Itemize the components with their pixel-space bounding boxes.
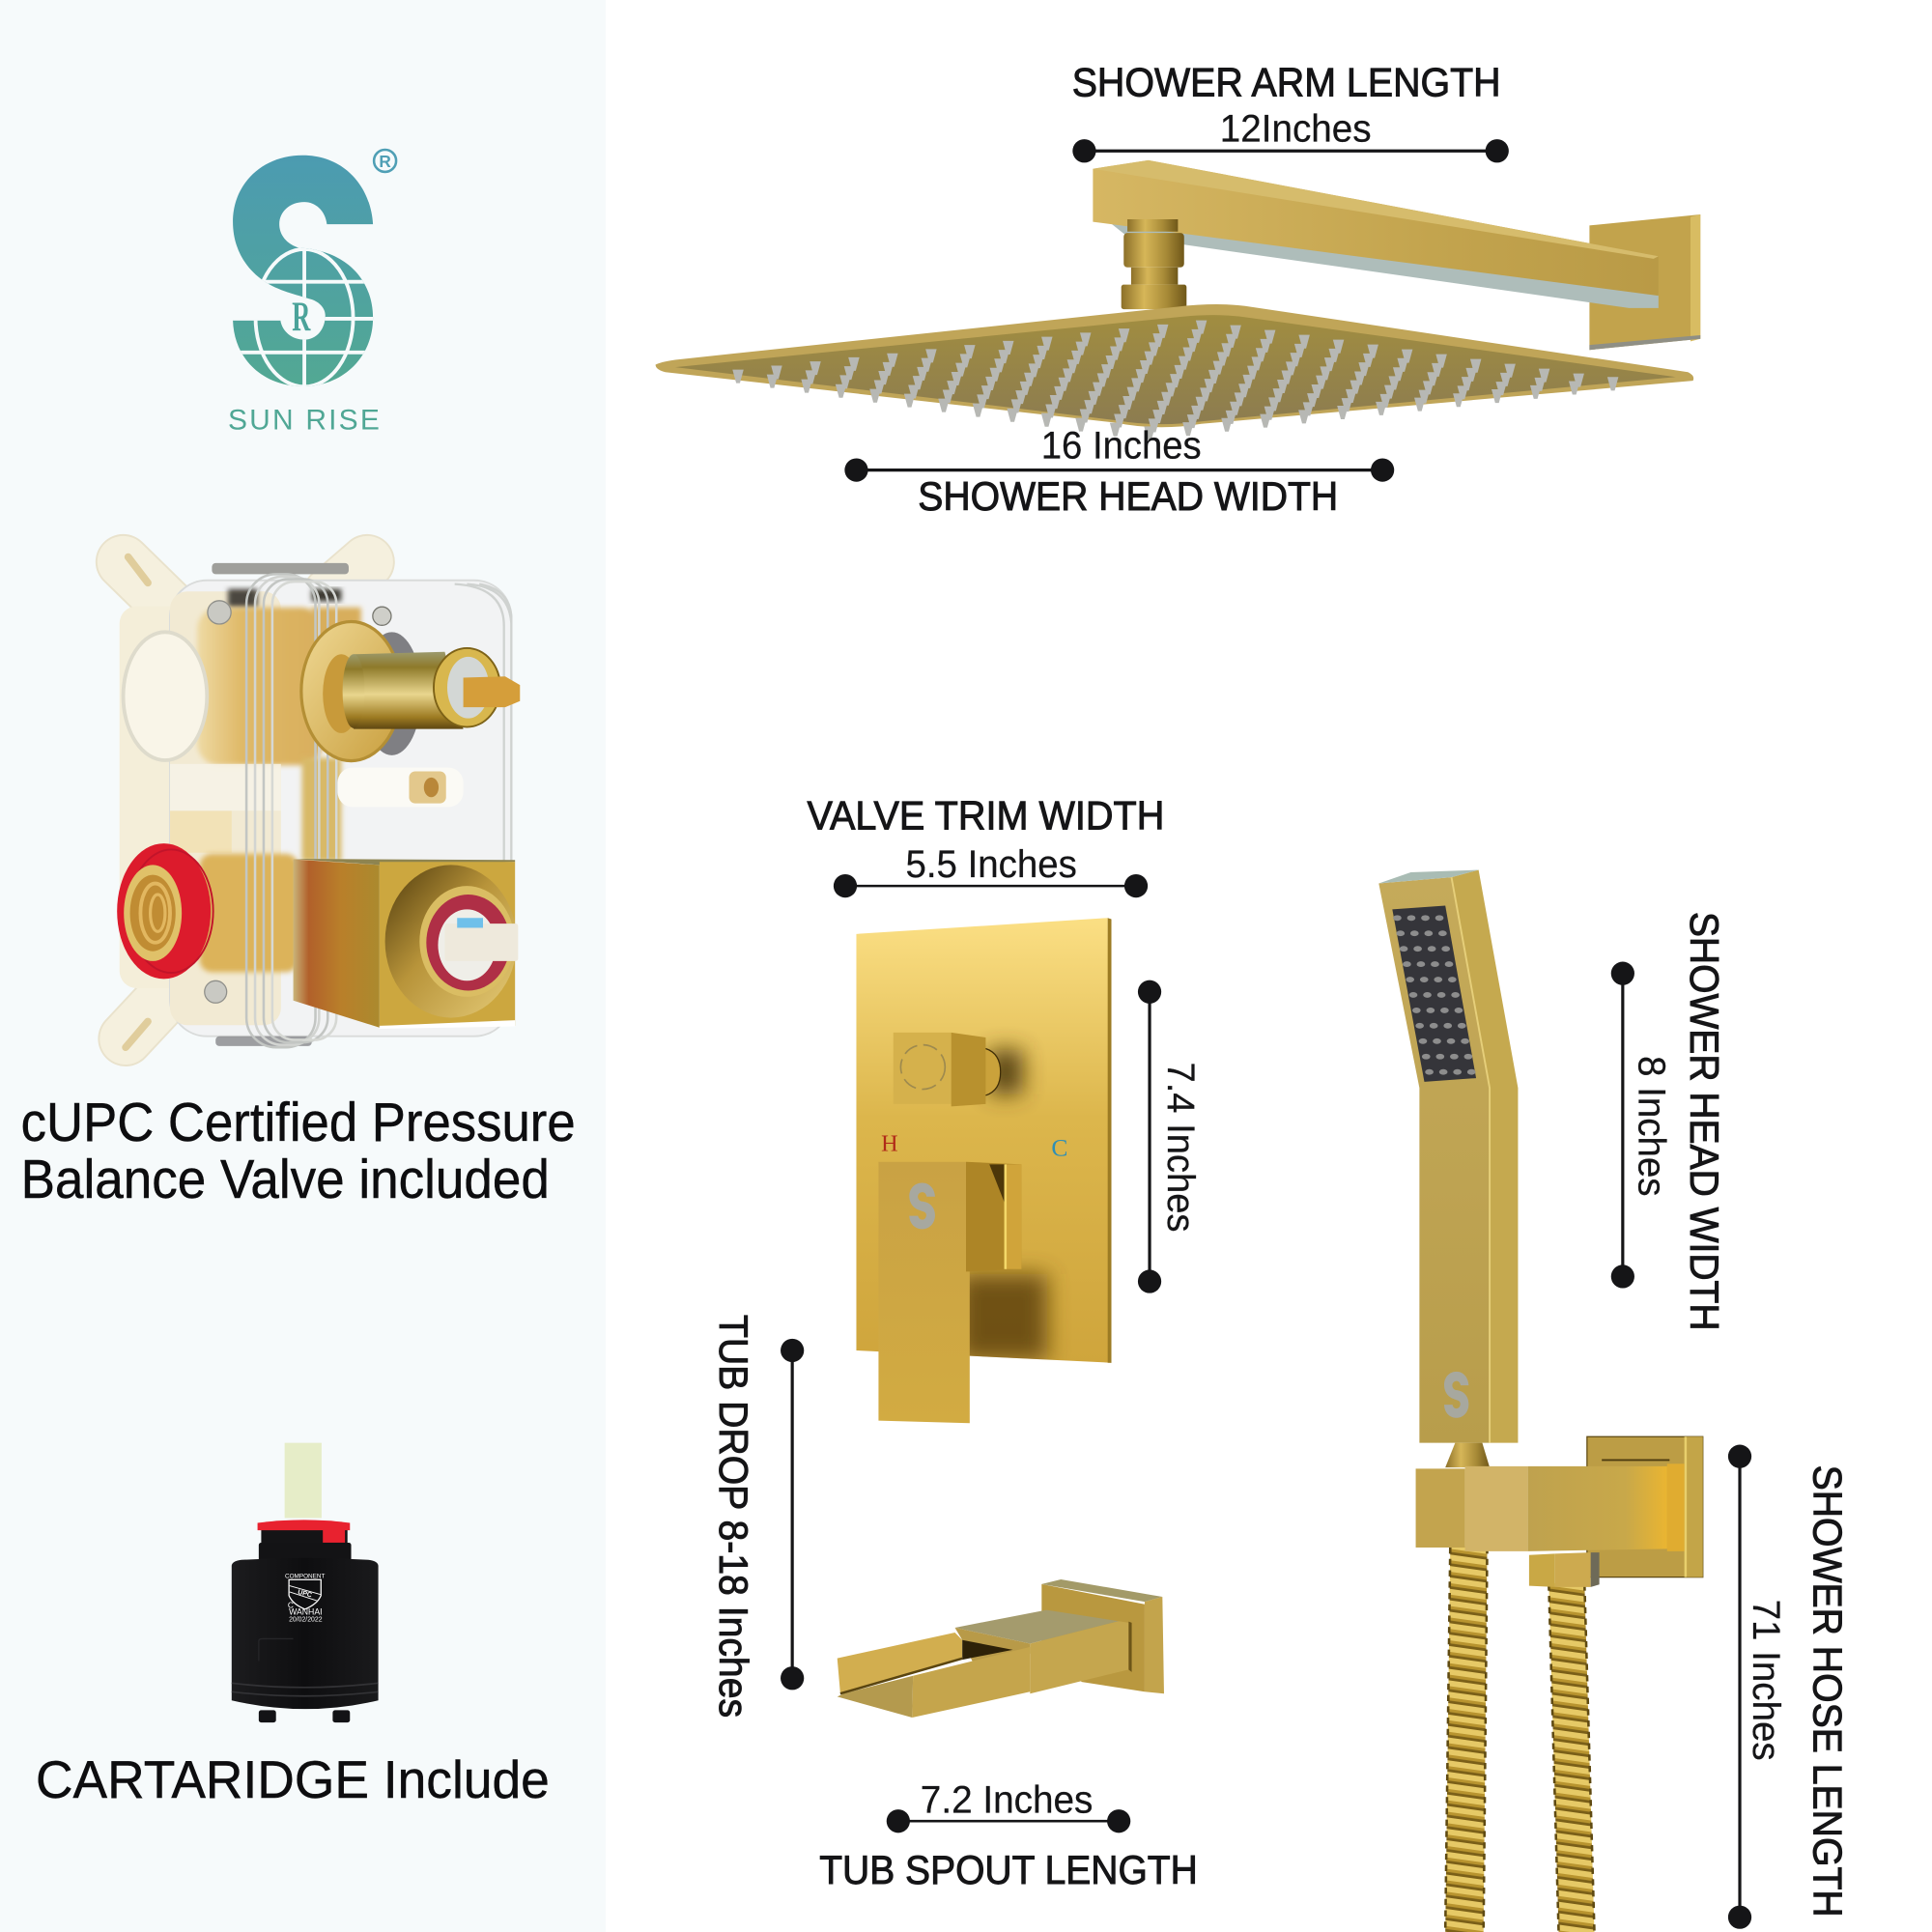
tub spout length dimension: TUB SPOUT LENGTH: [819, 1847, 1198, 1892]
tub spout length dimension: [819, 1778, 1198, 1892]
valve trim width dimension: 5.5 Inches: [906, 843, 1077, 886]
valve trim width dimension: VALVE TRIM WIDTH: [807, 792, 1164, 838]
brand logo: [222, 150, 396, 437]
cartridge photo: [232, 1443, 379, 1722]
valve trim plate: C: [1051, 1133, 1067, 1161]
valve trim plate: H: [881, 1130, 898, 1156]
pressure balance valve photo: [117, 557, 520, 1047]
hose length dimension: [1728, 1445, 1851, 1929]
tub drop dimension: TUB DROP 8-18 Inches: [711, 1315, 756, 1718]
hand shower height dimension: 8 Inches: [1630, 1056, 1672, 1197]
tub spout: [838, 1579, 1164, 1718]
valve caption: cUPC Certified Pressure: [21, 1092, 576, 1152]
hand shower height dimension: [1611, 912, 1727, 1331]
valve trim height dimension: 7.4 Inches: [1159, 1062, 1202, 1233]
hand shower: [1378, 870, 1518, 1467]
left panel background: [0, 0, 606, 1932]
brand logo: SUN RISE: [228, 405, 380, 437]
cartridge photo: 20/02/2022: [289, 1617, 323, 1624]
tub drop dimension: [711, 1315, 804, 1718]
tub spout length dimension: 7.2 Inches: [921, 1778, 1093, 1821]
cartridge photo: COMPONENT: [285, 1573, 325, 1579]
cartridge photo: C: [288, 1601, 294, 1610]
rain shower head with arm: [656, 160, 1700, 440]
hand shower bracket and hoses: [1416, 1436, 1703, 1932]
brand logo: R: [292, 294, 311, 340]
shower head width dimension: SHOWER HEAD WIDTH: [918, 473, 1338, 519]
cartridge photo: WANHAI: [289, 1607, 323, 1617]
brand logo: R: [379, 152, 391, 171]
shower arm dimension: 12Inches: [1220, 108, 1372, 151]
cartridge caption: CARTARIDGE Include: [36, 1749, 550, 1809]
shower head width dimension: [844, 424, 1394, 519]
valve trim width dimension: [807, 792, 1164, 897]
shower arm dimension: [1072, 59, 1509, 162]
hose length dimension: 71 Inches: [1745, 1600, 1787, 1761]
valve trim plate: [856, 918, 1112, 1423]
shower head width dimension: 16 Inches: [1041, 424, 1202, 467]
cartridge photo: UPC: [297, 1589, 312, 1600]
hand shower height dimension: SHOWER HEAD WIDTH: [1682, 912, 1727, 1331]
valve trim height dimension: [1138, 980, 1202, 1293]
valve caption: [21, 1092, 576, 1209]
shower arm dimension: SHOWER ARM LENGTH: [1072, 59, 1501, 104]
valve caption: Balance Valve included: [21, 1149, 550, 1209]
